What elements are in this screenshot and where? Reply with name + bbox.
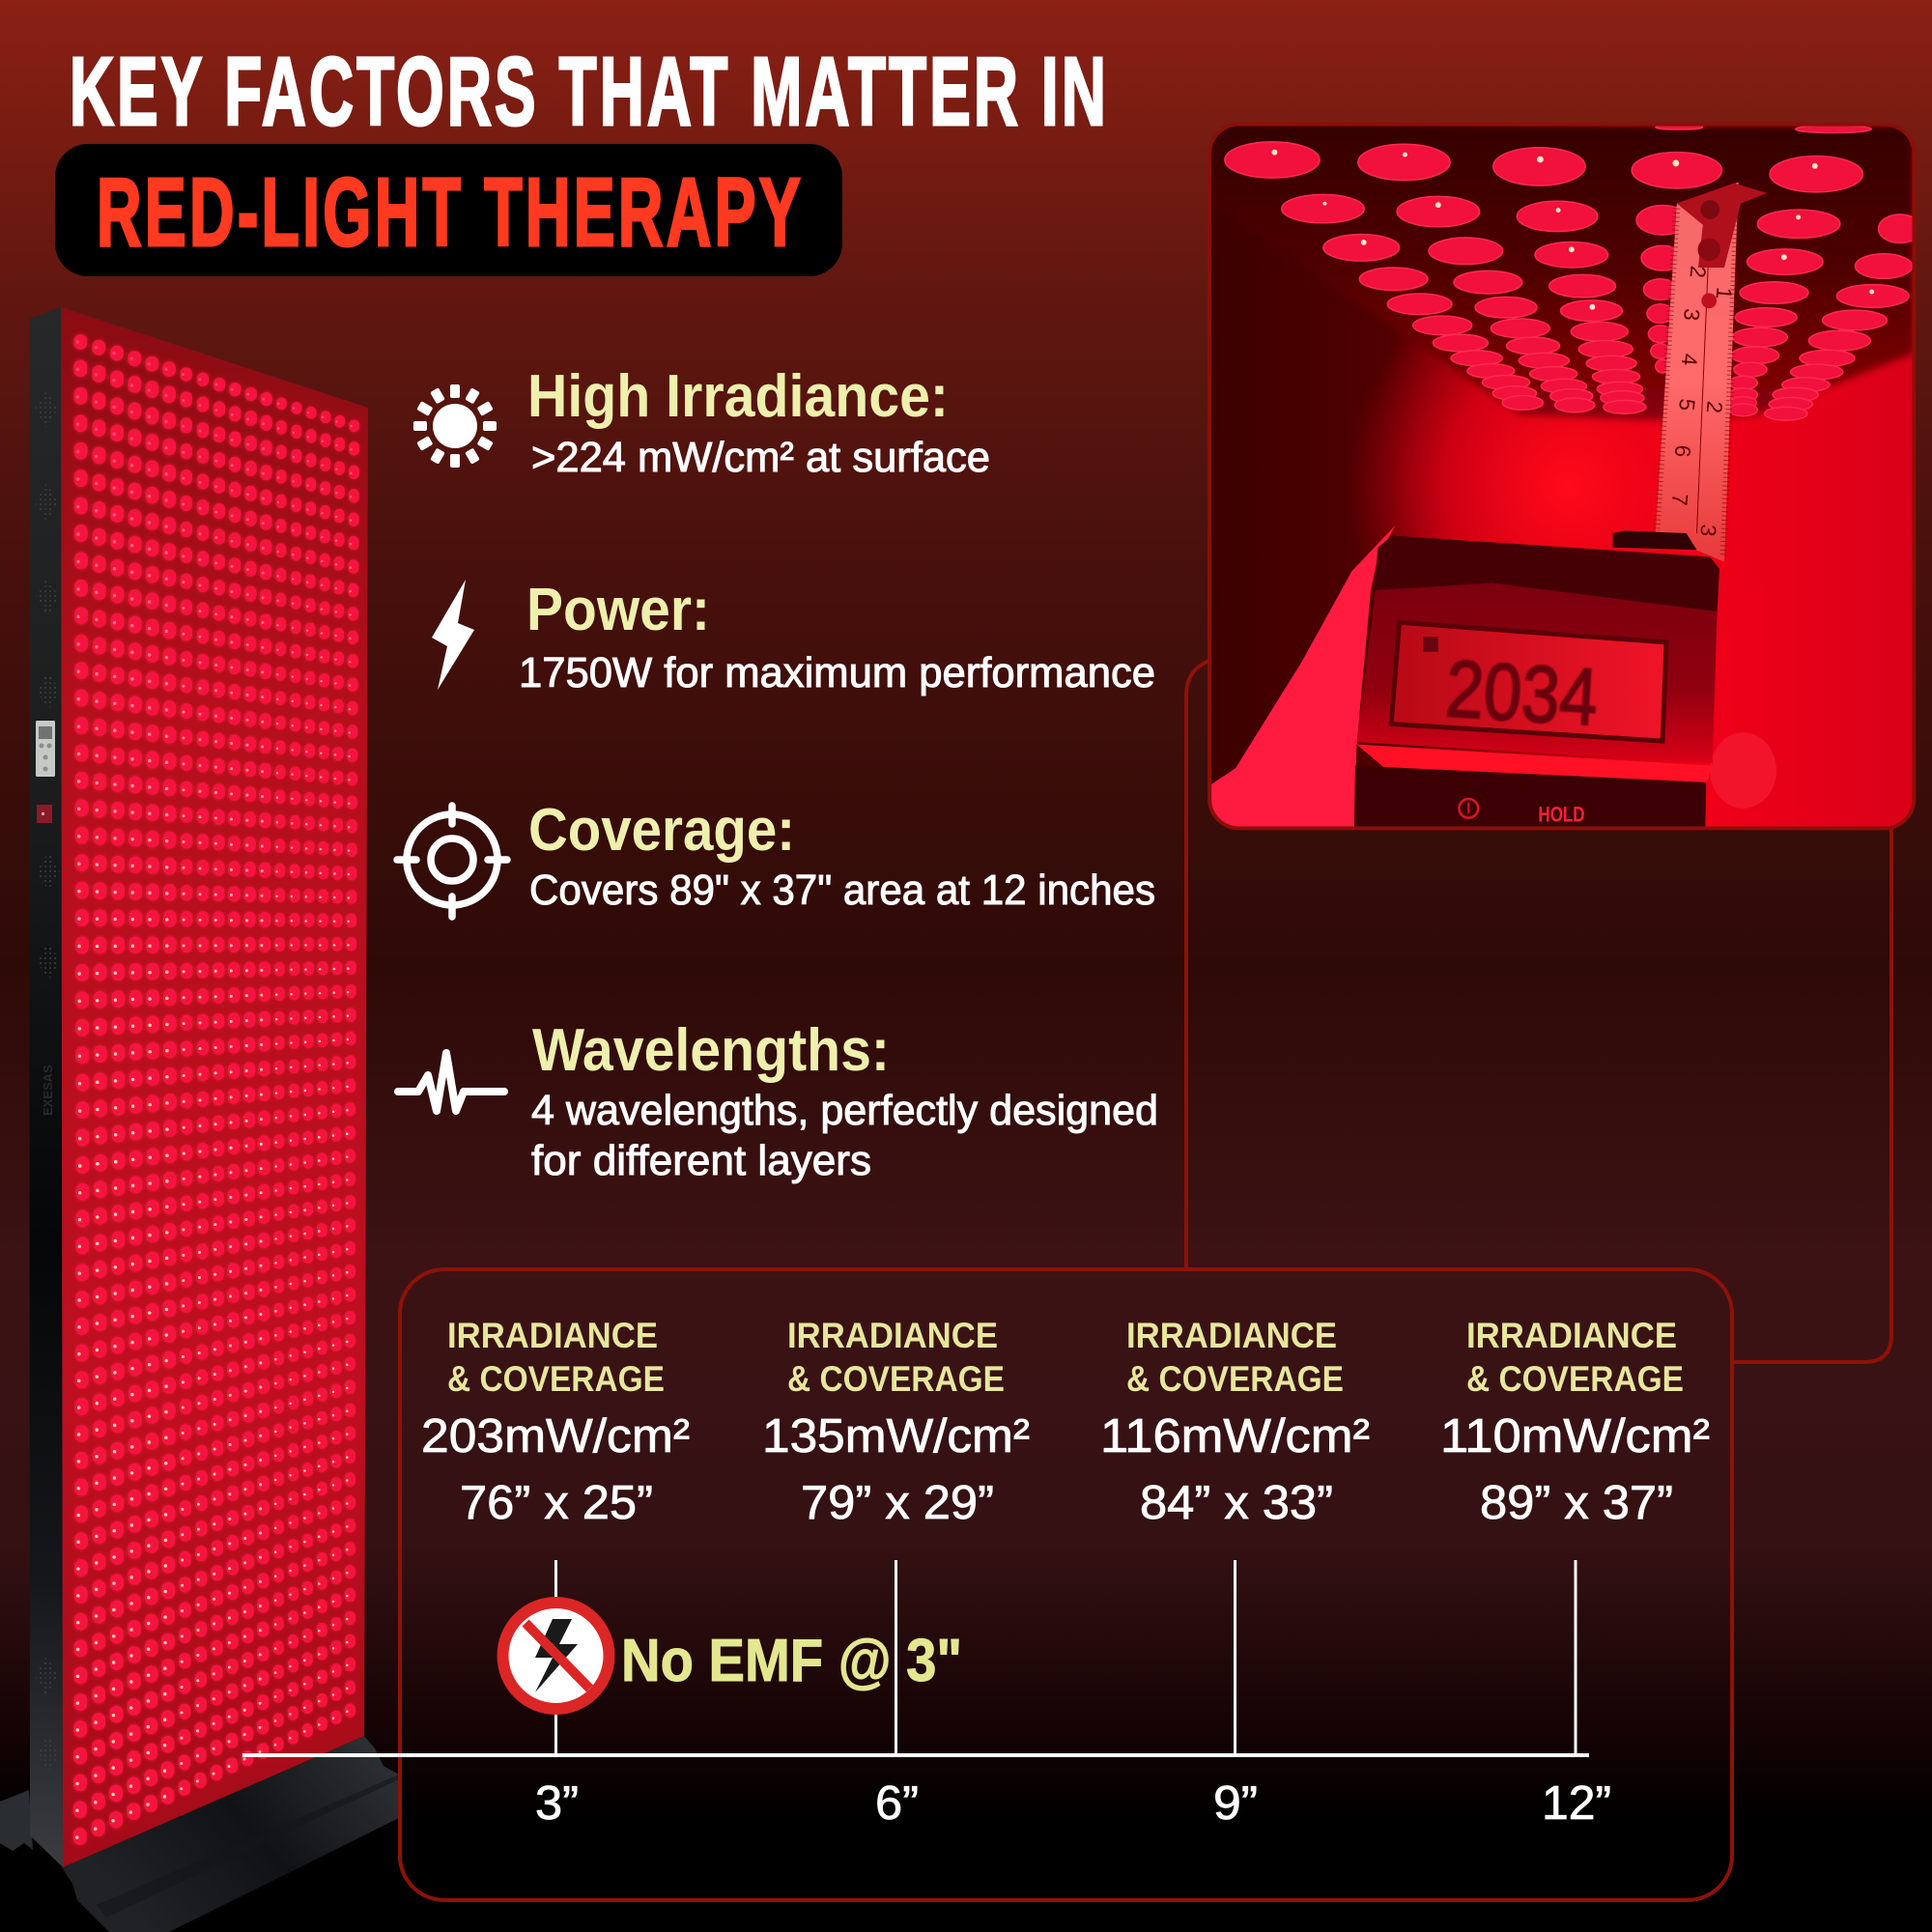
column: 3 inches: & COVERAGE bbox=[447, 1359, 665, 1399]
tape measure bbox=[1656, 183, 1767, 561]
photo frame bbox=[1209, 125, 1914, 828]
column: 6 inches: 135mW/cm² bbox=[762, 1410, 1030, 1463]
column: 9 inches: & COVERAGE bbox=[1126, 1359, 1344, 1399]
text: irradiance value: >224 mW/cm² at surface bbox=[531, 434, 990, 481]
tape measure: 3 bbox=[1695, 524, 1720, 537]
column: 12 inches: & COVERAGE bbox=[1466, 1359, 1684, 1399]
axis labels: 3” bbox=[535, 1777, 579, 1830]
column: 12 inches: 89” x 37” bbox=[1480, 1477, 1673, 1529]
column: 3 inches: 203mW/cm² bbox=[421, 1410, 690, 1463]
axis labels bbox=[535, 1777, 1611, 1830]
icon: no EMF sign bbox=[502, 1603, 609, 1709]
title pill: RED-LIGHT THERAPY bbox=[97, 158, 804, 267]
tape measure: 2 bbox=[1685, 265, 1710, 279]
icon: sun bbox=[413, 384, 497, 468]
text: wavelengths description: 4 wavelengths, perfectly designed bbox=[531, 1087, 1158, 1134]
title pill bbox=[55, 144, 842, 276]
axis labels: 9” bbox=[1213, 1777, 1258, 1830]
column: 9 inches: IRRADIANCE bbox=[1126, 1316, 1337, 1355]
tape measure: 3 bbox=[1679, 307, 1704, 322]
feature: wavelengths bbox=[398, 1017, 1158, 1184]
column: 3 inches bbox=[421, 1316, 690, 1529]
meter body bbox=[1354, 531, 1719, 828]
side logo: EXESAS bbox=[41, 1065, 55, 1116]
feature: coverage bbox=[397, 797, 1155, 917]
heading: wavelengths: Wavelengths: bbox=[532, 1017, 890, 1084]
text: wavelengths description bbox=[531, 1087, 1158, 1184]
meter LCD: 2034 bbox=[1443, 642, 1601, 743]
column: 6 inches bbox=[762, 1316, 1030, 1529]
callout: no EMF: No EMF @ 3" bbox=[621, 1628, 962, 1694]
tape measure: 6 bbox=[1670, 444, 1695, 458]
panel face bbox=[61, 307, 368, 1867]
tape measure: 4 bbox=[1677, 353, 1702, 367]
icon: pulse bbox=[398, 1053, 504, 1111]
meter buttons: HOLD bbox=[1538, 803, 1585, 827]
title bbox=[55, 38, 1109, 276]
axis labels: 6” bbox=[875, 1777, 919, 1830]
hand bbox=[1209, 526, 1396, 828]
feature: high irradiance bbox=[413, 363, 990, 481]
column: 3 inches: IRRADIANCE bbox=[447, 1316, 658, 1355]
column: 9 inches: 116mW/cm² bbox=[1100, 1410, 1370, 1463]
icon: lightning bolt bbox=[432, 580, 474, 690]
meter buttons bbox=[1458, 798, 1584, 821]
column: 9 inches bbox=[1100, 1316, 1370, 1529]
tick line over callout bbox=[895, 1633, 897, 1700]
column: 6 inches: & COVERAGE bbox=[787, 1359, 1005, 1399]
power switch bbox=[37, 805, 52, 823]
column: 9 inches: 84” x 33” bbox=[1140, 1477, 1333, 1529]
tape measure: 2 bbox=[1702, 400, 1727, 414]
LED grid bbox=[77, 341, 355, 1851]
feature: power bbox=[432, 577, 1155, 696]
column: 12 inches: 110mW/cm² bbox=[1440, 1410, 1710, 1463]
column: 6 inches: IRRADIANCE bbox=[787, 1316, 998, 1355]
tape measure: 5 bbox=[1674, 398, 1699, 412]
text: coverage value: Covers 89" x 37" area at 12 inches bbox=[529, 867, 1155, 914]
reflection blob bbox=[1710, 732, 1776, 809]
column: 12 inches: IRRADIANCE bbox=[1466, 1316, 1677, 1355]
panel side bbox=[29, 307, 63, 1867]
connector outline behind photo and table bbox=[1186, 659, 1891, 1362]
column: 3 inches: 76” x 25” bbox=[460, 1477, 653, 1529]
heading: high irradiance: High Irradiance: bbox=[527, 363, 949, 430]
panel underside bbox=[1209, 125, 1914, 420]
control panel bbox=[36, 721, 55, 777]
text: power value: 1750W for maximum performance bbox=[519, 649, 1155, 696]
tape measure: 1 bbox=[1712, 286, 1737, 300]
text: wavelengths description: for different layers bbox=[531, 1137, 871, 1184]
LED hot spots bbox=[1271, 150, 1874, 310]
icon: target bbox=[397, 806, 507, 917]
panel: irradiance and coverage by distance bbox=[242, 1269, 1732, 1900]
stand base bbox=[0, 1736, 399, 1932]
photo background bbox=[1209, 125, 1914, 828]
product: LED panel on stand bbox=[0, 307, 399, 1932]
axis labels: 12” bbox=[1542, 1777, 1611, 1830]
column: 12 inches bbox=[1440, 1316, 1710, 1529]
tape measure: 7 bbox=[1667, 493, 1692, 507]
panel outline bbox=[400, 1269, 1732, 1900]
heading: coverage: Coverage: bbox=[528, 797, 795, 864]
title line 1: KEY FACTORS THAT MATTER IN bbox=[70, 38, 1109, 146]
distance axis bbox=[242, 1560, 1611, 1830]
LEDs in perspective bbox=[1225, 125, 1921, 420]
meter LCD bbox=[1391, 622, 1666, 743]
photo: irradiance meter under panel bbox=[1209, 125, 1921, 828]
column: 6 inches: 79” x 29” bbox=[801, 1477, 994, 1529]
heading: power: Power: bbox=[526, 577, 710, 643]
